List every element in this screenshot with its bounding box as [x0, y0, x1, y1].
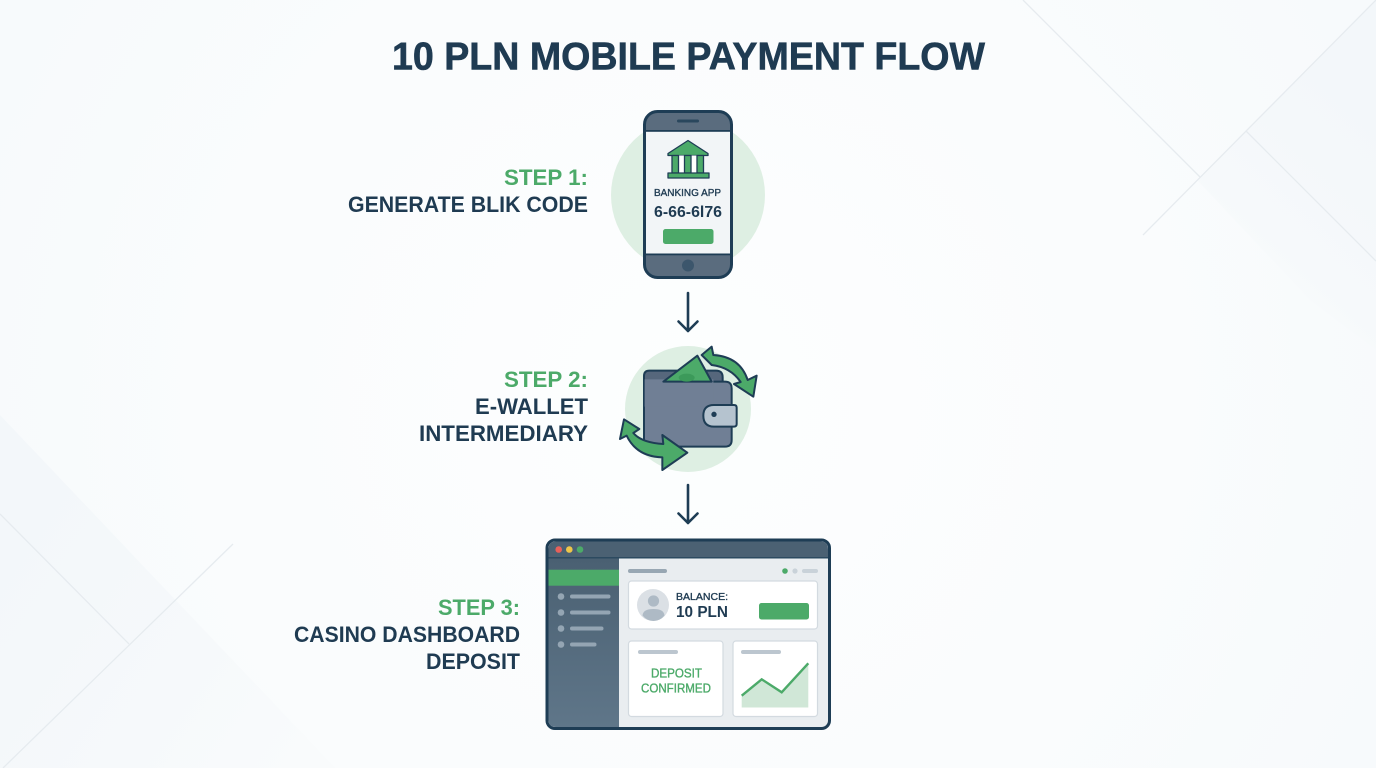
deposit confirmed card — [628, 641, 723, 716]
line chart card — [733, 641, 818, 716]
step 1 label: STEP 1: — [504, 165, 588, 190]
wallet clasp — [703, 405, 737, 427]
wallet body — [644, 380, 732, 447]
text: balance amount: 10 PLN — [676, 604, 728, 621]
step 2 label: STEP 2: — [504, 367, 588, 392]
button — [759, 603, 809, 620]
step 2 label: INTERMEDIARY — [419, 421, 588, 446]
arrow: step 2 to step 3 — [678, 485, 698, 523]
title bar — [548, 542, 828, 558]
deposit confirmed card: CONFIRMED — [641, 682, 711, 696]
icon: bank — [668, 140, 709, 178]
step 3 label: STEP 3: — [438, 595, 520, 620]
step 2 label — [419, 367, 588, 446]
step 3 label: DEPOSIT — [426, 649, 520, 674]
step 2 label: E-WALLET — [475, 394, 588, 419]
top bar — [628, 568, 818, 574]
step 1 label — [348, 165, 588, 217]
text: BLIK code: 6-66-6l76 — [654, 204, 722, 221]
button — [663, 229, 714, 244]
title: 10 PLN MOBILE PAYMENT FLOW — [392, 36, 985, 78]
step 1 label: GENERATE BLIK CODE — [348, 192, 588, 217]
wallet back — [644, 371, 723, 383]
arrow: exchange bottom — [620, 419, 687, 470]
step 3 label — [294, 595, 520, 674]
casino dashboard window — [547, 540, 830, 728]
text: banking app: BANKING APP — [654, 187, 721, 199]
icon: banking phone — [611, 112, 765, 278]
deposit confirmed card: DEPOSIT — [651, 666, 702, 680]
icon: wallet with exchange arrows — [620, 346, 757, 472]
sidebar — [548, 558, 619, 727]
icon: avatar — [637, 589, 669, 621]
balance card — [628, 581, 818, 629]
arrow: step 1 to step 2 — [678, 293, 698, 331]
banknote — [663, 356, 712, 382]
text: balance: BALANCE: — [676, 591, 728, 603]
arrow: exchange top — [702, 347, 757, 397]
step 3 label: CASINO DASHBOARD — [294, 622, 520, 647]
